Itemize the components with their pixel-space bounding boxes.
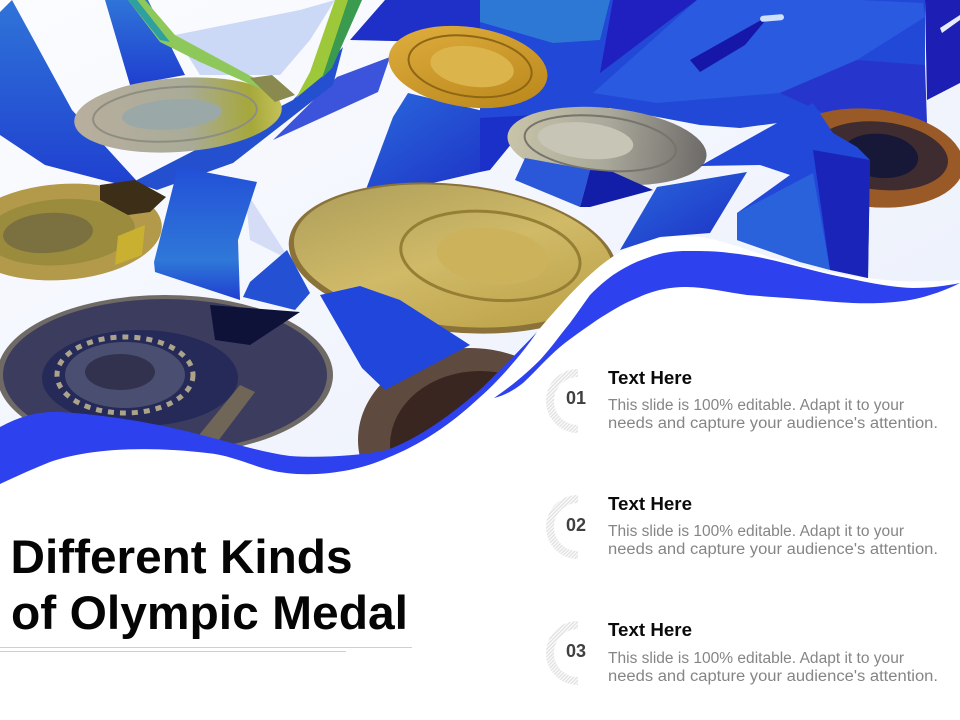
heading 02: Text Here xyxy=(608,494,692,514)
body 03: This slide is 100% editable. Adapt it to your xyxy=(608,650,904,667)
body 01: needs and capture your audience's attention. xyxy=(608,415,938,432)
heading 03: Text Here xyxy=(608,620,692,640)
body 03 xyxy=(608,650,938,685)
medal: silver top left xyxy=(72,71,284,159)
body 02 xyxy=(608,523,938,558)
blue wave: upper xyxy=(494,251,960,398)
title: of Olympic Medal xyxy=(11,586,408,639)
title: Different Kinds xyxy=(10,530,352,583)
body 03: needs and capture your audience's attention. xyxy=(608,668,938,685)
title underlines xyxy=(0,647,412,652)
number 02: 02 xyxy=(566,515,586,535)
body 01: This slide is 100% editable. Adapt it to your xyxy=(608,397,904,414)
medal: gold left xyxy=(0,177,165,287)
medal ribbons, yellow-green xyxy=(128,0,362,102)
ribbons behind medals xyxy=(0,0,960,250)
number 01: 01 xyxy=(566,388,586,408)
title xyxy=(10,530,408,639)
ribbon over bronze medal xyxy=(700,103,870,278)
body 02: needs and capture your audience's attention. xyxy=(608,541,938,558)
white wave area xyxy=(0,236,960,720)
item 02 xyxy=(550,494,938,558)
medal: gold top centre xyxy=(383,16,553,118)
blue wave: lower xyxy=(0,332,537,484)
medal: bronze right xyxy=(775,100,960,216)
ribbons in front of medals xyxy=(154,158,653,390)
heading 01: Text Here xyxy=(608,368,692,388)
icon: striped arc 01 xyxy=(550,373,578,429)
item 01 xyxy=(550,368,938,432)
medal: dark bottom centre xyxy=(358,348,582,532)
item 03 xyxy=(550,620,938,685)
icon: striped arc 03 xyxy=(550,625,578,681)
icon: striped arc 02 xyxy=(550,499,578,555)
medal: dark bottom left xyxy=(0,295,333,455)
body 01 xyxy=(608,397,938,432)
medal: large gold centre xyxy=(281,167,625,349)
number 03: 03 xyxy=(566,641,586,661)
photo: medals and blue ribbons xyxy=(0,0,960,532)
body 02: This slide is 100% editable. Adapt it to your xyxy=(608,523,904,540)
medal: silver right xyxy=(504,98,710,194)
